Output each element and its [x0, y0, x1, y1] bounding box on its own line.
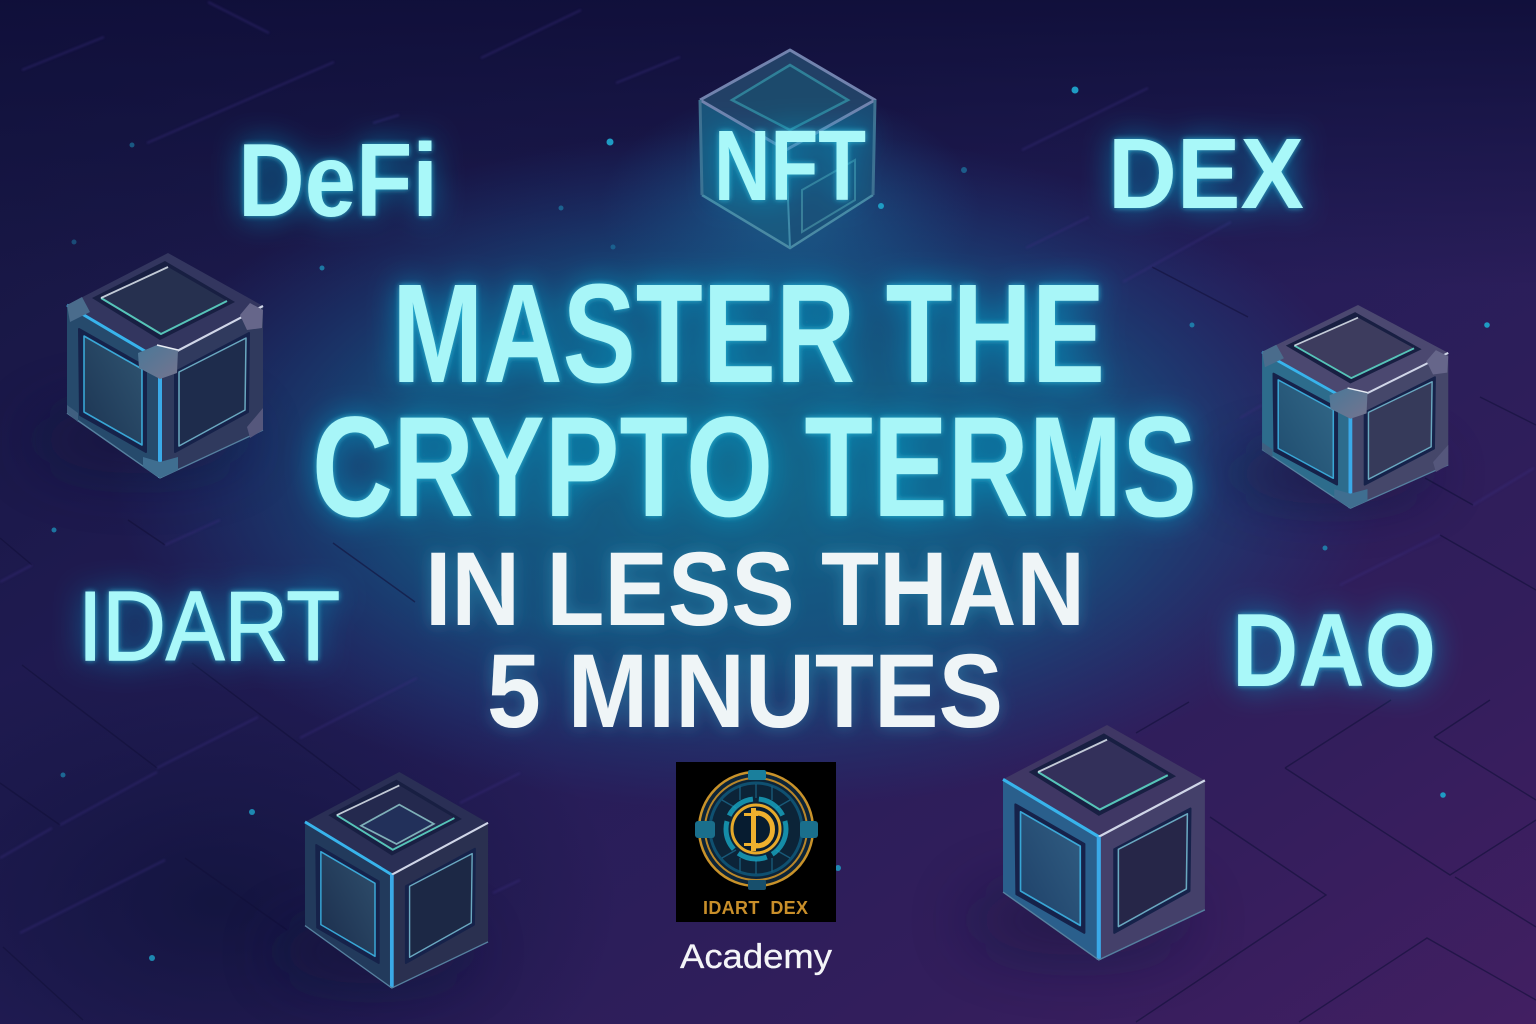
label: DEX: DEX — [1108, 118, 1304, 230]
label: DeFi: DeFi — [238, 123, 438, 239]
title line: CRYPTO TERMS: CRYPTO TERMS — [312, 388, 1197, 547]
label: NFT: NFT — [714, 110, 866, 222]
logo wordmark: IDART DEX — [703, 898, 808, 918]
logo glyph — [744, 808, 772, 851]
cube: NFT translucent — [700, 50, 875, 248]
cube: top left — [30, 253, 263, 478]
label: DAO: DAO — [1232, 593, 1436, 709]
title line: MASTER THE: MASTER THE — [392, 254, 1105, 412]
title — [312, 254, 1197, 750]
cube: right — [1227, 305, 1448, 508]
label: IDART: IDART — [78, 571, 340, 681]
subtitle line: 5 MINUTES: 5 MINUTES — [487, 633, 1003, 750]
logo: IDART DEX — [676, 762, 836, 922]
subtitle line: IN LESS THAN: IN LESS THAN — [425, 531, 1085, 648]
particles — [52, 86, 1490, 961]
cube: bottom right — [965, 725, 1205, 960]
cube: bottom left — [270, 772, 488, 988]
caption: Academy: Academy — [680, 938, 832, 976]
